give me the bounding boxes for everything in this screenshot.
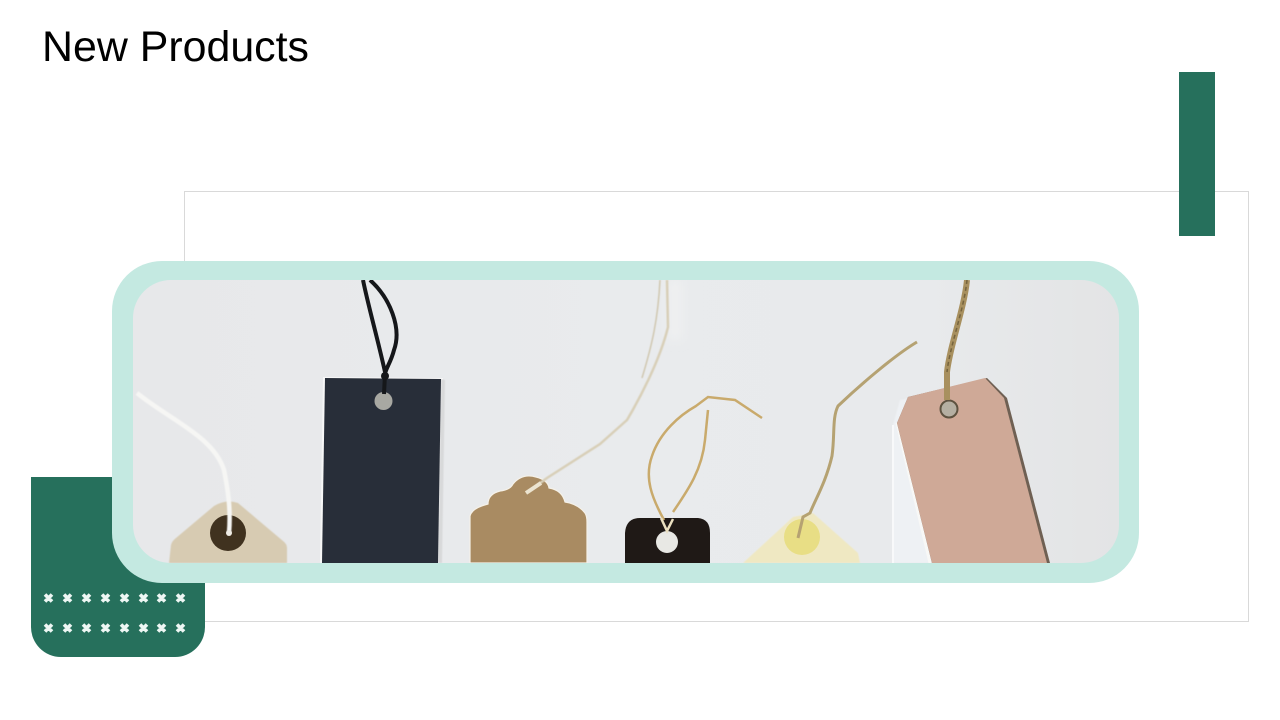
tag: blush pink large — [893, 280, 1050, 563]
mint rounded photo frame — [112, 261, 1139, 583]
tag: cream with white string — [137, 393, 287, 563]
tag: navy with black string — [320, 280, 445, 563]
tag: black with gold string — [625, 397, 762, 563]
outlined background frame — [184, 192, 1248, 622]
title: New Products — [42, 23, 309, 71]
photo of product tags — [133, 280, 1119, 563]
green vertical accent bar — [1179, 72, 1215, 236]
cross pattern — [45, 594, 184, 632]
tag: pale yellow — [743, 342, 917, 563]
green corner block with cross pattern — [31, 477, 205, 657]
tag: kraft scalloped — [470, 280, 682, 563]
